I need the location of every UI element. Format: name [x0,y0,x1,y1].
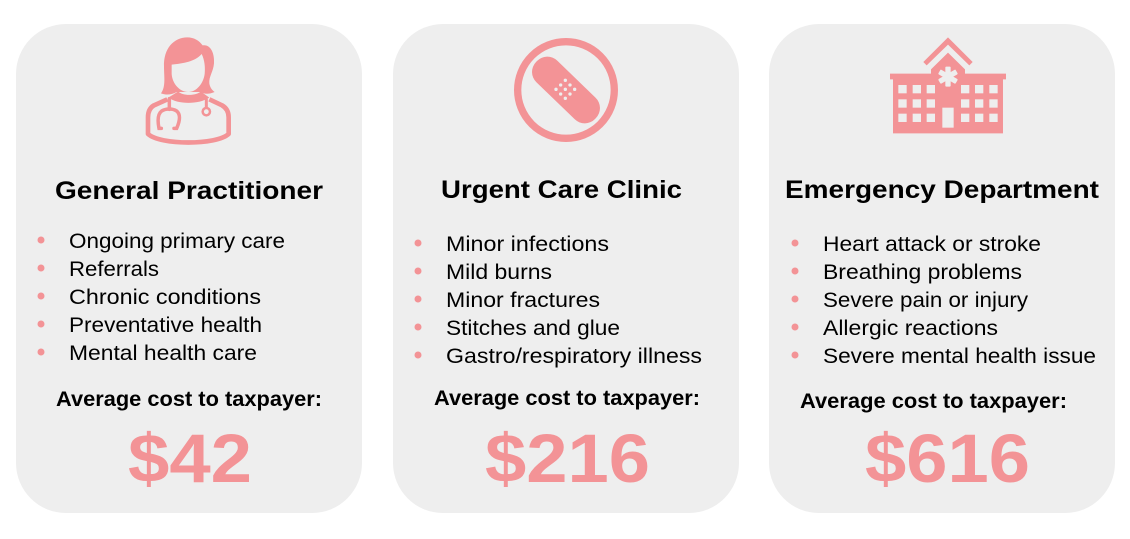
cost label: Average cost to taxpayer: [56,388,322,411]
bullet list: Referrals [69,258,159,281]
cost label: Average cost to taxpayer: [434,387,700,410]
bullet list: Minor fractures [446,289,600,312]
bullet list: Mental health care [69,342,257,365]
bullet list: Severe pain or injury [823,289,1029,312]
cost value: $216 [485,420,650,497]
cost value: $616 [865,420,1030,497]
cost value: $42 [128,420,252,497]
bullet list: Ongoing primary care [69,230,285,253]
bullet list: Minor infections [446,233,609,256]
bullet list: Stitches and glue [446,317,620,340]
bullet list: Breathing problems [823,261,1022,284]
heading: Urgent Care Clinic [441,176,682,204]
bullet list: Preventative health [69,314,262,337]
bullet list: Mild burns [446,261,552,284]
cost label: Average cost to taxpayer: [800,390,1067,413]
bullet list [38,230,285,365]
bullet list: Chronic conditions [69,286,261,309]
bullet list: Severe mental health issue [823,345,1096,368]
panel: General Practitioner [16,24,362,513]
panel: Urgent Care Clinic [393,24,739,513]
icon: doctor [148,37,229,142]
panel: Emergency Department [769,24,1115,513]
heading: Emergency Department [785,176,1100,204]
bullet list [414,233,702,368]
bullet list: Gastro/respiratory illness [446,345,702,368]
icon: bandage [518,42,614,138]
icon: hospital [890,37,1006,133]
heading: General Practitioner [55,177,323,205]
bullet list: Heart attack or stroke [823,233,1041,256]
bullet list [792,233,1096,368]
bullet list: Allergic reactions [823,317,998,340]
